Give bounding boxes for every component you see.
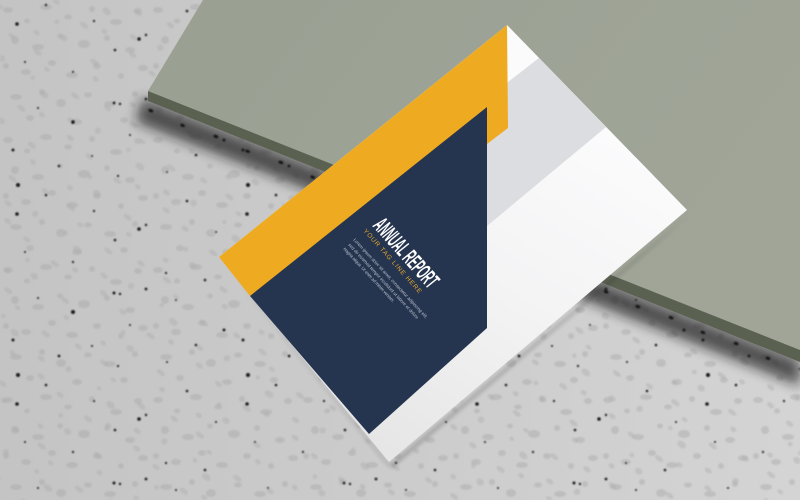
body line 3: magna aliqua. Ut enim ad minim veniam. <box>342 247 396 303</box>
tagline: YOUR TAG LINE HERE <box>361 228 423 295</box>
body line 1: Lorem ipsum dolor sit amet, consectetur adipiscing elit, <box>352 238 429 319</box>
yellow band <box>219 25 508 296</box>
slab side edge <box>148 91 800 362</box>
slab shadow on the ground <box>136 98 800 386</box>
grey band <box>487 58 606 226</box>
shadow speckles <box>145 100 800 380</box>
body text <box>342 238 429 320</box>
paper sheet <box>219 25 687 462</box>
navy panel <box>250 107 487 434</box>
paper shadow <box>222 214 690 468</box>
annual report brochure: ANNUAL REPORT <box>368 213 445 292</box>
body line 2: sed do eiusmod tempor incididunt ut labore et dolore <box>347 243 420 320</box>
green slab <box>148 0 800 362</box>
annual report brochure <box>219 25 687 462</box>
slab top surface <box>148 0 800 350</box>
